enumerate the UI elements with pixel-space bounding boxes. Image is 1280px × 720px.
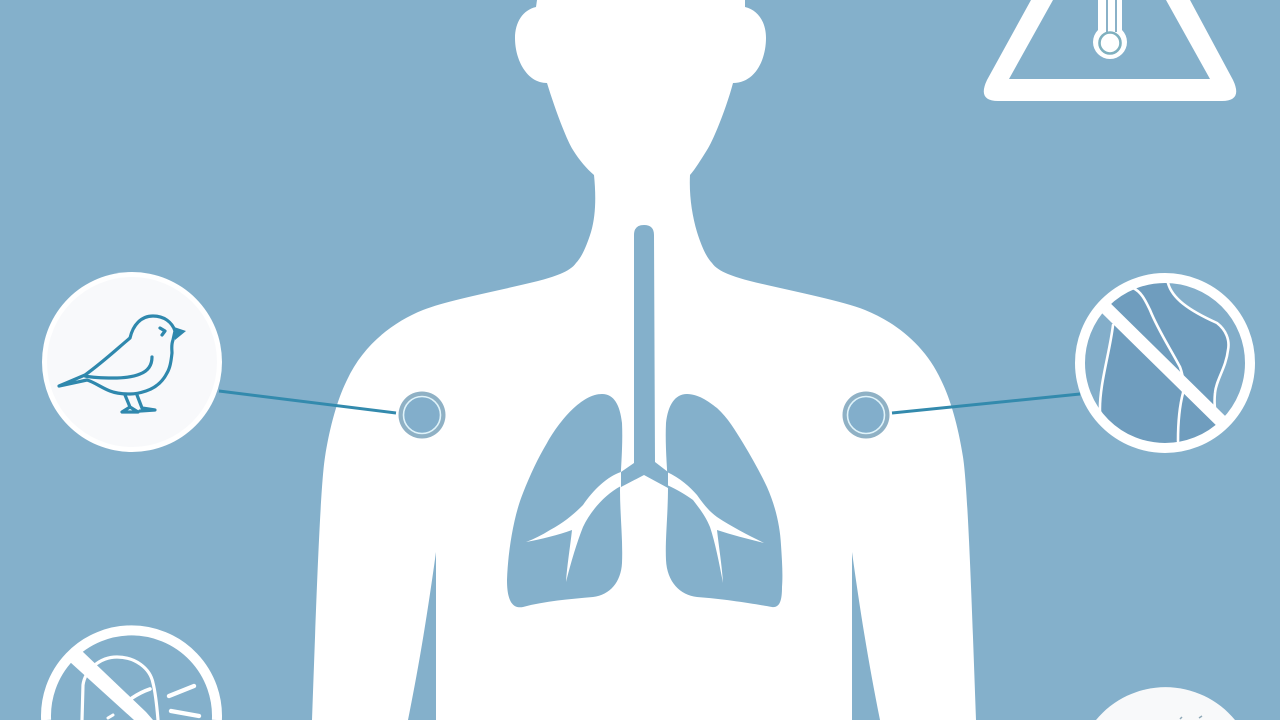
- icon: bird in white circle: [42, 272, 222, 452]
- left shoulder node: [398, 392, 446, 438]
- connector: left node to bird: [219, 391, 396, 413]
- thermometer: [1093, 0, 1127, 59]
- icon: prohibited cough: [46, 630, 217, 720]
- left lung: [507, 394, 622, 607]
- right lung: [666, 394, 782, 607]
- left bronchi: [526, 472, 621, 582]
- icon: white circle, bottom right: [1096, 687, 1235, 720]
- connector: right node to skin: [892, 394, 1080, 413]
- trachea: [621, 225, 668, 488]
- right bronchi: [667, 472, 764, 583]
- icon: warning triangle with thermometer: [984, 0, 1236, 101]
- human body silhouette: [312, 0, 976, 720]
- icon: prohibited skin: [1080, 278, 1250, 448]
- right shoulder node: [842, 392, 890, 438]
- lungs and airway: [507, 225, 782, 607]
